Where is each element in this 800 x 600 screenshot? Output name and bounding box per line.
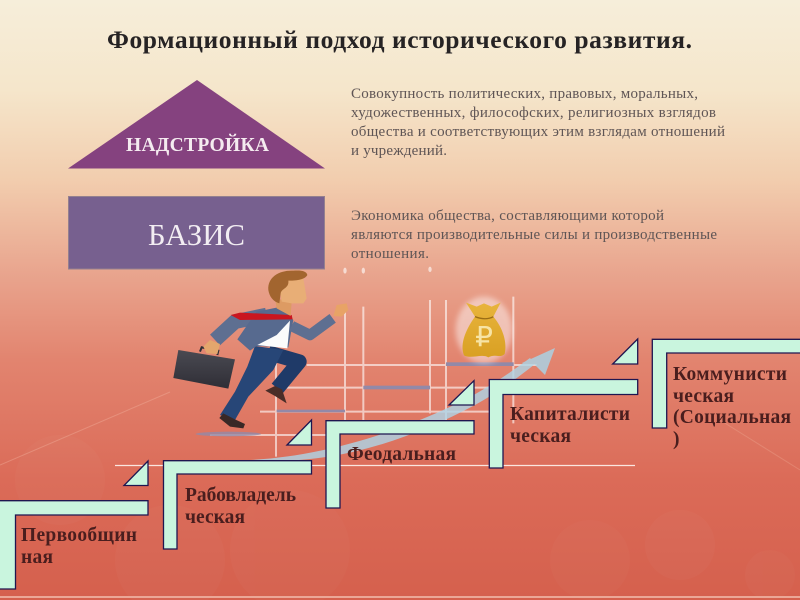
hair (268, 270, 307, 303)
text: надстройка description (351, 86, 725, 159)
left arm (215, 315, 267, 340)
text: базис description: отношения. (351, 246, 429, 262)
triangle: надстройка (68, 80, 325, 168)
step 5: коммунистическая: (Социальная (673, 407, 791, 428)
triangle: надстройка: НАДСТРОЙКА (126, 134, 269, 156)
tie (231, 313, 293, 320)
title: Формационный подход исторического развития. (107, 25, 692, 54)
icon: running businessman (173, 270, 348, 428)
text: базис description: Экономика общества, составляющими которой (351, 208, 664, 224)
step 1: первообщинная: ная (21, 547, 53, 568)
back shoe (265, 386, 287, 403)
growth arrow (250, 348, 555, 461)
icon: money bag (456, 297, 512, 363)
text: базис description: являются производительные силы и производственные (351, 227, 717, 243)
rectangle: базис: БАЗИС (148, 218, 245, 252)
step 5: коммунистическая: ) (673, 429, 680, 450)
shirt (257, 321, 290, 348)
right hand (333, 303, 348, 317)
rectangle: базис (68, 196, 324, 269)
step 2: рабовладельческая: ческая (185, 507, 245, 528)
step 5: коммунистическая: Коммунисти (673, 364, 787, 385)
text: надстройка description: общества и соответствующих этим взглядам отношений (351, 124, 725, 140)
step 5: коммунистическая: ческая (673, 386, 734, 407)
icon: money bag: ₽ (475, 320, 493, 353)
step 2: рабовладельческая (164, 420, 312, 549)
right arm (292, 318, 333, 335)
text: надстройка description: художественных, философских, религиозных взглядов (351, 105, 716, 121)
step 3: феодальная: Феодальная (347, 444, 456, 465)
staircase grid (196, 267, 537, 457)
step 3: феодальная (326, 381, 474, 508)
step 4: капиталистическая (489, 339, 638, 468)
step 4: капиталистическая: Капиталисти (510, 404, 630, 425)
step 4: капиталистическая: ческая (510, 426, 571, 447)
jacket (237, 307, 293, 351)
front leg (220, 346, 283, 420)
text: надстройка description: и учреждений. (351, 143, 447, 159)
step 1: первообщинная (0, 461, 148, 589)
front shoe (219, 413, 245, 428)
briefcase (173, 347, 235, 389)
text: базис description (351, 208, 717, 262)
horizon line (115, 464, 635, 466)
text: надстройка description: Совокупность политических, правовых, моральных, (351, 86, 698, 102)
step 5: коммунистическая (652, 339, 800, 450)
step 1: первообщинная: Первообщин (21, 525, 137, 546)
back leg (268, 353, 299, 388)
neck (275, 298, 292, 316)
left hand (203, 340, 220, 354)
face (278, 278, 307, 303)
step 2: рабовладельческая: Рабовладель (185, 485, 296, 506)
